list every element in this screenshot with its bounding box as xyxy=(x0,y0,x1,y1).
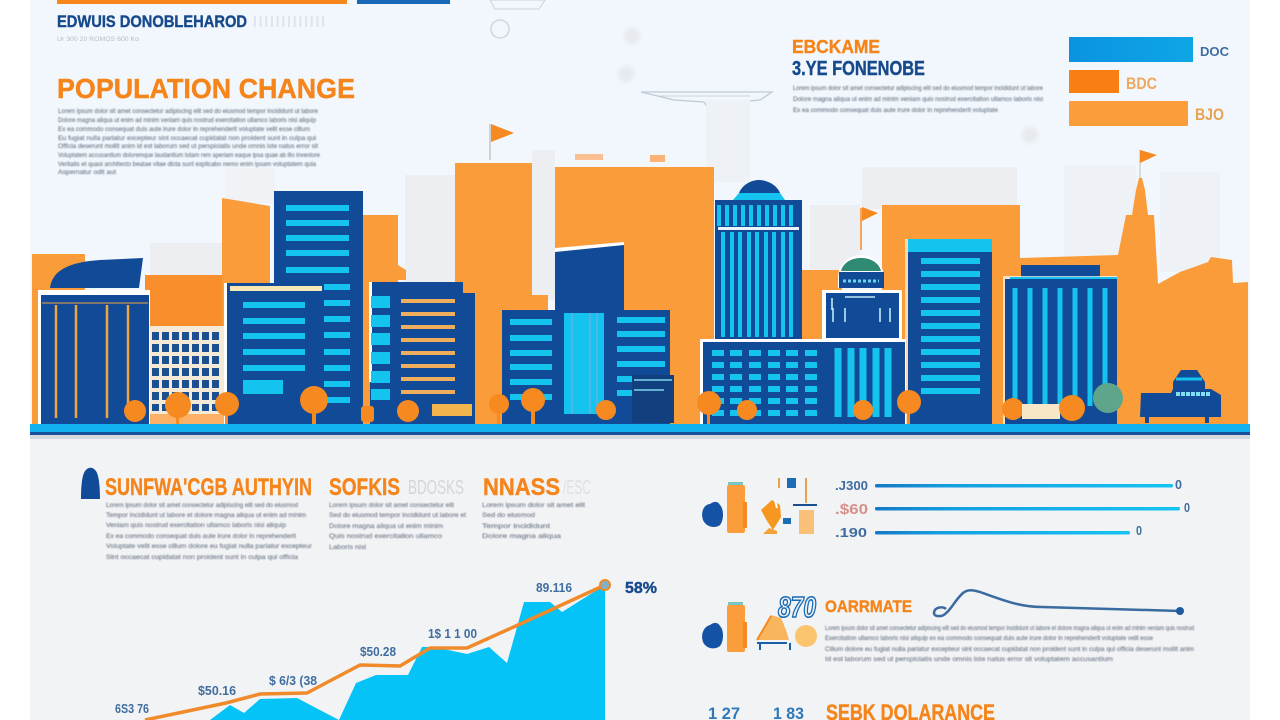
icon: landmark cluster xyxy=(761,478,817,534)
data labels: 6S3 76 xyxy=(115,701,149,716)
progress row one: .J300 xyxy=(835,478,868,493)
heading: carmate: OARRMATE xyxy=(825,597,912,616)
icon: navy cluster xyxy=(702,623,723,648)
text block: population intro: Eu fugiat nulla pariatur excepteur sint occaecat cupidatat non proident sunt in culpa qui xyxy=(58,135,316,142)
text block: column two: Lorem ipsum dolor sit amet consectetur elit xyxy=(329,502,454,509)
icon: tent and number: 870 xyxy=(778,592,816,624)
text block: column two: Dolore magna aliqua ut enim minim xyxy=(329,523,443,530)
end marker xyxy=(600,580,610,590)
bar chart: top right: BDC xyxy=(1126,74,1157,93)
text block: column one: Sint occaecat cupidatat non proident sunt in culpa qui officia xyxy=(106,554,298,561)
text block: population intro: Officia deserunt mollit anim id est laborum sed ut perspiciatis unde omnis iste natus error sit xyxy=(58,143,318,150)
bar chart: top right: BJO xyxy=(1195,105,1224,124)
heading: column one: SUNFWA'CGB AUTHYIN xyxy=(105,474,312,501)
text block: population intro: Lorem ipsum dolor sit amet consectetur adipiscing elit sed do eiusmod tempor incididunt ut labore xyxy=(58,108,318,115)
building: window grid xyxy=(150,326,225,425)
area series xyxy=(210,585,605,720)
building: domed tower xyxy=(715,180,802,340)
header block: title and subtitle xyxy=(57,12,326,43)
top accent bars xyxy=(57,0,450,4)
progress row two: .$60 xyxy=(835,501,868,518)
building: central block with atrium xyxy=(502,242,674,425)
text block: carmate description: Exercitation ullamco laboris nisi aliquip ex ea commodo consequat duis aute irure dolor in reprehenderit voluptate velit esse xyxy=(825,635,1153,642)
heading: population change: POPULATION CHANGE xyxy=(57,73,355,104)
heading: report title: EDWUIS DONOBLEHAROD xyxy=(57,12,247,31)
building: green dome hall xyxy=(822,255,902,340)
text block: column one: Voluptate velit esse cillum dolore eu fugiat nulla pariatur excepteur xyxy=(106,543,313,550)
bar chart: top right: DOC xyxy=(1200,44,1230,59)
panel: lower left stats text xyxy=(81,468,591,561)
text block: column two: Laboris nisi xyxy=(329,544,366,551)
background grey buildings xyxy=(150,100,1220,300)
data labels xyxy=(115,580,657,716)
ground strip xyxy=(30,424,1250,439)
faded heading: column three: /ESC xyxy=(563,477,591,499)
progress row two xyxy=(835,500,1190,518)
text block: column three: Sed do eiusmod xyxy=(482,512,535,519)
panel: bottom row xyxy=(708,700,995,720)
text block: column one: Tempor incididunt ut labore et dolore magna aliqua ut enim ad minim xyxy=(106,512,306,519)
building: office with bars xyxy=(224,283,324,425)
building: domed office left xyxy=(38,258,150,425)
data labels: 89.116 xyxy=(536,580,572,595)
faded heading: column two: BDOSKS xyxy=(408,477,464,499)
icon: orange bottle xyxy=(727,602,747,652)
data labels: 1$ 1 1 00 xyxy=(428,626,477,641)
line series xyxy=(145,585,605,720)
building: tall tower xyxy=(274,191,363,425)
text block: legend description: Lorem ipsum dolor sit amet consectetur adipiscing elit sed do eiusmod tempor incididunt ut labore xyxy=(793,85,1043,92)
heading: column two: SOFKIS xyxy=(329,474,400,501)
flags xyxy=(490,124,1157,250)
text block: column two xyxy=(329,502,466,551)
bar chart: top right xyxy=(1069,37,1230,126)
text block: column two: Sed do eiusmod tempor incididunt ut labore et xyxy=(329,512,466,519)
text block: legend description: Ex ea commodo consequat duis aute irure dolor in reprehenderit voluptate xyxy=(793,107,998,114)
text block: carmate description: Lorem ipsum dolor sit amet consectetur adipiscing elit sed do eiusmod tempor incididunt ut labore et dolore magna aliqua ut enim ad minim veniam quis nostrud xyxy=(825,625,1194,632)
text block: column three xyxy=(482,502,585,540)
data labels: $50.16 xyxy=(198,683,236,698)
text block: carmate description: Cillum dolore eu fugiat nulla pariatur excepteur sint occaecat cupidatat non proident sunt in culpa qui officia deserunt mollit anim xyxy=(825,646,1194,653)
text block: column one: Ex ea commodo consequat duis aute irure dolor in reprehenderit xyxy=(106,533,296,540)
block: legend heading and text xyxy=(792,37,1043,114)
text block: column one: Lorem ipsum dolor sit amet consectetur adipiscing elit sed do eiusmod xyxy=(106,502,298,509)
text block: legend description: Dolore magna aliqua ut enim ad minim veniam quis nostrud exercitation ullamco laboris nisi xyxy=(793,96,1043,103)
progress row two: 0 xyxy=(1184,500,1190,515)
heading: navy: 3.YE FONENOBE xyxy=(792,58,925,80)
progress row three: .190 xyxy=(835,525,867,540)
vehicle: bus right xyxy=(1140,370,1221,423)
progress row one xyxy=(835,477,1182,493)
faded heading continuation: IIIIIIIIIIIII xyxy=(252,14,326,31)
building: striped office right xyxy=(1003,265,1117,425)
text block: column three: Lorem ipsum dolor sit amet elit xyxy=(482,502,585,509)
text block: population intro xyxy=(58,108,320,176)
data labels: $50.28 xyxy=(360,644,396,659)
icon: orange bottle xyxy=(727,482,747,533)
building: mixed window office xyxy=(369,282,475,425)
text block: column one: Veniam quis nostrud exercitation ullamco laboris nisi aliquip xyxy=(106,522,286,529)
text block: population intro: Aspernatur odit aut xyxy=(58,169,116,176)
text block: population intro: Voluptatem accusantium doloremque laudantium totam rem aperiam eaque ipsa quae ab illo inventore xyxy=(58,152,320,159)
panel: carmate block xyxy=(702,590,1194,663)
data labels: $ 6/3 (38 xyxy=(269,673,317,688)
icon: tent and number xyxy=(757,592,817,650)
building: wide base block xyxy=(700,339,906,425)
text block: carmate description: Id est laborum sed ut perspiciatis unde omnis iste natus error sit voluptatem accusantium xyxy=(825,656,1113,663)
text block: column one xyxy=(106,502,313,561)
text block: carmate description xyxy=(825,625,1194,663)
text block: population intro: Ex ea commodo consequat duis aute irure dolor in reprehenderit voluptate velit esse cillum xyxy=(58,126,310,133)
text block: column three: Dolore magna aliqua xyxy=(482,533,562,540)
icon: navy cluster xyxy=(702,502,723,527)
panel: icon row with progress lines xyxy=(702,477,1190,540)
data labels: 58% xyxy=(625,580,657,597)
text block: legend description xyxy=(793,85,1043,114)
progress row one: 0 xyxy=(1175,477,1182,492)
area and line chart: population growth xyxy=(115,580,657,720)
building: tall bars tower xyxy=(905,239,992,425)
text block: population intro: Dolore magna aliqua ut enim ad minim veniam quis nostrud exercitation ullamco laboris nisi aliquip xyxy=(58,117,316,124)
text block: population intro: Veritatis et quasi architecto beatae vitae dicta sunt explicabo nemo enim ipsam voluptatem quia xyxy=(58,161,316,168)
background orange buildings xyxy=(32,163,1248,425)
progress row three: 0 xyxy=(1136,523,1142,538)
sky decorations: clouds and airship xyxy=(490,0,1038,143)
heading: small orange: EBCKAME xyxy=(792,37,880,57)
heading: column three: NNASS xyxy=(483,474,560,501)
trees row xyxy=(124,383,1123,424)
progress row three xyxy=(835,523,1142,540)
icon: bell xyxy=(81,468,100,499)
text block: column two: Quis nostrud exercitation ullamco xyxy=(329,533,442,540)
city skyline illustration xyxy=(30,100,1250,439)
line sparkline xyxy=(934,590,1184,616)
subtitle: Ur 300 20 ROMOS 600 Ko xyxy=(57,37,140,43)
text block: column three: Tempor incididunt xyxy=(482,523,550,530)
